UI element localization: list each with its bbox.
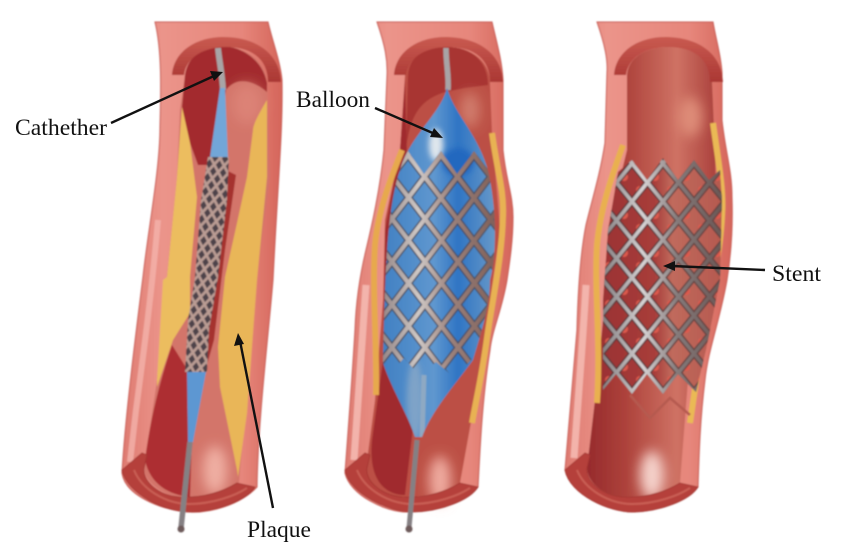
lower cut ring bbox=[122, 453, 255, 512]
vessel 3: expanded stent in open artery bbox=[564, 20, 734, 514]
vessel 1: catheter inside plaque-narrowed artery bbox=[122, 22, 282, 532]
faint lower stent zigzag bbox=[630, 395, 690, 418]
pale lower glow bbox=[203, 446, 227, 494]
arrow: to catheter bbox=[111, 71, 223, 123]
catheter wire top bbox=[446, 48, 448, 90]
lumen bbox=[587, 47, 715, 497]
artery wall bbox=[122, 22, 282, 512]
artery wall bbox=[345, 22, 513, 512]
label: Cathether: Cathether bbox=[15, 115, 107, 141]
label: Plaque: Plaque bbox=[247, 517, 311, 543]
left yellow strip bbox=[596, 145, 623, 403]
upper lumen glow bbox=[678, 97, 702, 137]
wall highlight bbox=[354, 285, 366, 460]
arrow: to balloon bbox=[375, 108, 443, 138]
right yellow strip bbox=[472, 133, 503, 423]
catheter wire bottom bbox=[409, 440, 417, 528]
pale lower glow bbox=[429, 456, 451, 504]
catheter end bbox=[406, 526, 412, 532]
dark lumen left bbox=[371, 80, 414, 495]
lumen bbox=[144, 46, 270, 497]
upper dark lumen bbox=[406, 47, 488, 150]
catheter wire top bbox=[218, 48, 223, 90]
stent mesh bbox=[602, 158, 723, 395]
lower cut ring bbox=[565, 453, 698, 512]
label: Balloon: Balloon bbox=[296, 87, 370, 113]
stent struts bbox=[602, 159, 722, 395]
upper cut ring bbox=[394, 37, 503, 82]
stent shadow bbox=[602, 158, 722, 390]
arrow: to stent bbox=[663, 261, 765, 271]
balloon deep blue patch bbox=[442, 148, 474, 176]
balloon pale patch bbox=[407, 360, 423, 440]
dark lower lumen bbox=[145, 345, 194, 497]
lumen bbox=[366, 47, 500, 497]
upper cut ring bbox=[614, 37, 723, 82]
lower lumen glow bbox=[640, 451, 664, 499]
catheter balloon braid bbox=[184, 156, 230, 373]
wall highlight bbox=[574, 285, 586, 458]
catheter wire bottom bbox=[181, 442, 190, 528]
arrow: to plaque bbox=[234, 333, 273, 508]
balloon highlight bbox=[429, 129, 443, 161]
wall highlight bbox=[130, 220, 158, 462]
catheter blue tip top bbox=[210, 88, 228, 157]
catheter end bbox=[178, 526, 184, 532]
dark upper lumen bbox=[182, 46, 267, 165]
stent mesh on balloon bbox=[382, 150, 496, 372]
right yellow strip bbox=[690, 123, 722, 423]
tissue behind stent bbox=[602, 168, 722, 388]
upper cut ring bbox=[172, 37, 281, 82]
vessel 2: inflated balloon with stent bbox=[344, 20, 514, 534]
right plaque bbox=[218, 100, 267, 477]
balloon bbox=[382, 88, 496, 438]
left plaque bbox=[157, 107, 197, 387]
right lumen pale bbox=[460, 92, 480, 128]
artery wall bbox=[565, 22, 732, 512]
red tissue spots bbox=[604, 174, 722, 382]
left yellow strip bbox=[374, 150, 402, 395]
dark sliver beside catheter bbox=[190, 170, 236, 372]
balloon lower sheen bbox=[422, 375, 424, 440]
lower cut ring bbox=[345, 453, 478, 512]
pale upper lumen glow bbox=[232, 84, 262, 124]
catheter blue tip bottom bbox=[187, 372, 206, 442]
label: Stent: Stent bbox=[772, 261, 821, 287]
